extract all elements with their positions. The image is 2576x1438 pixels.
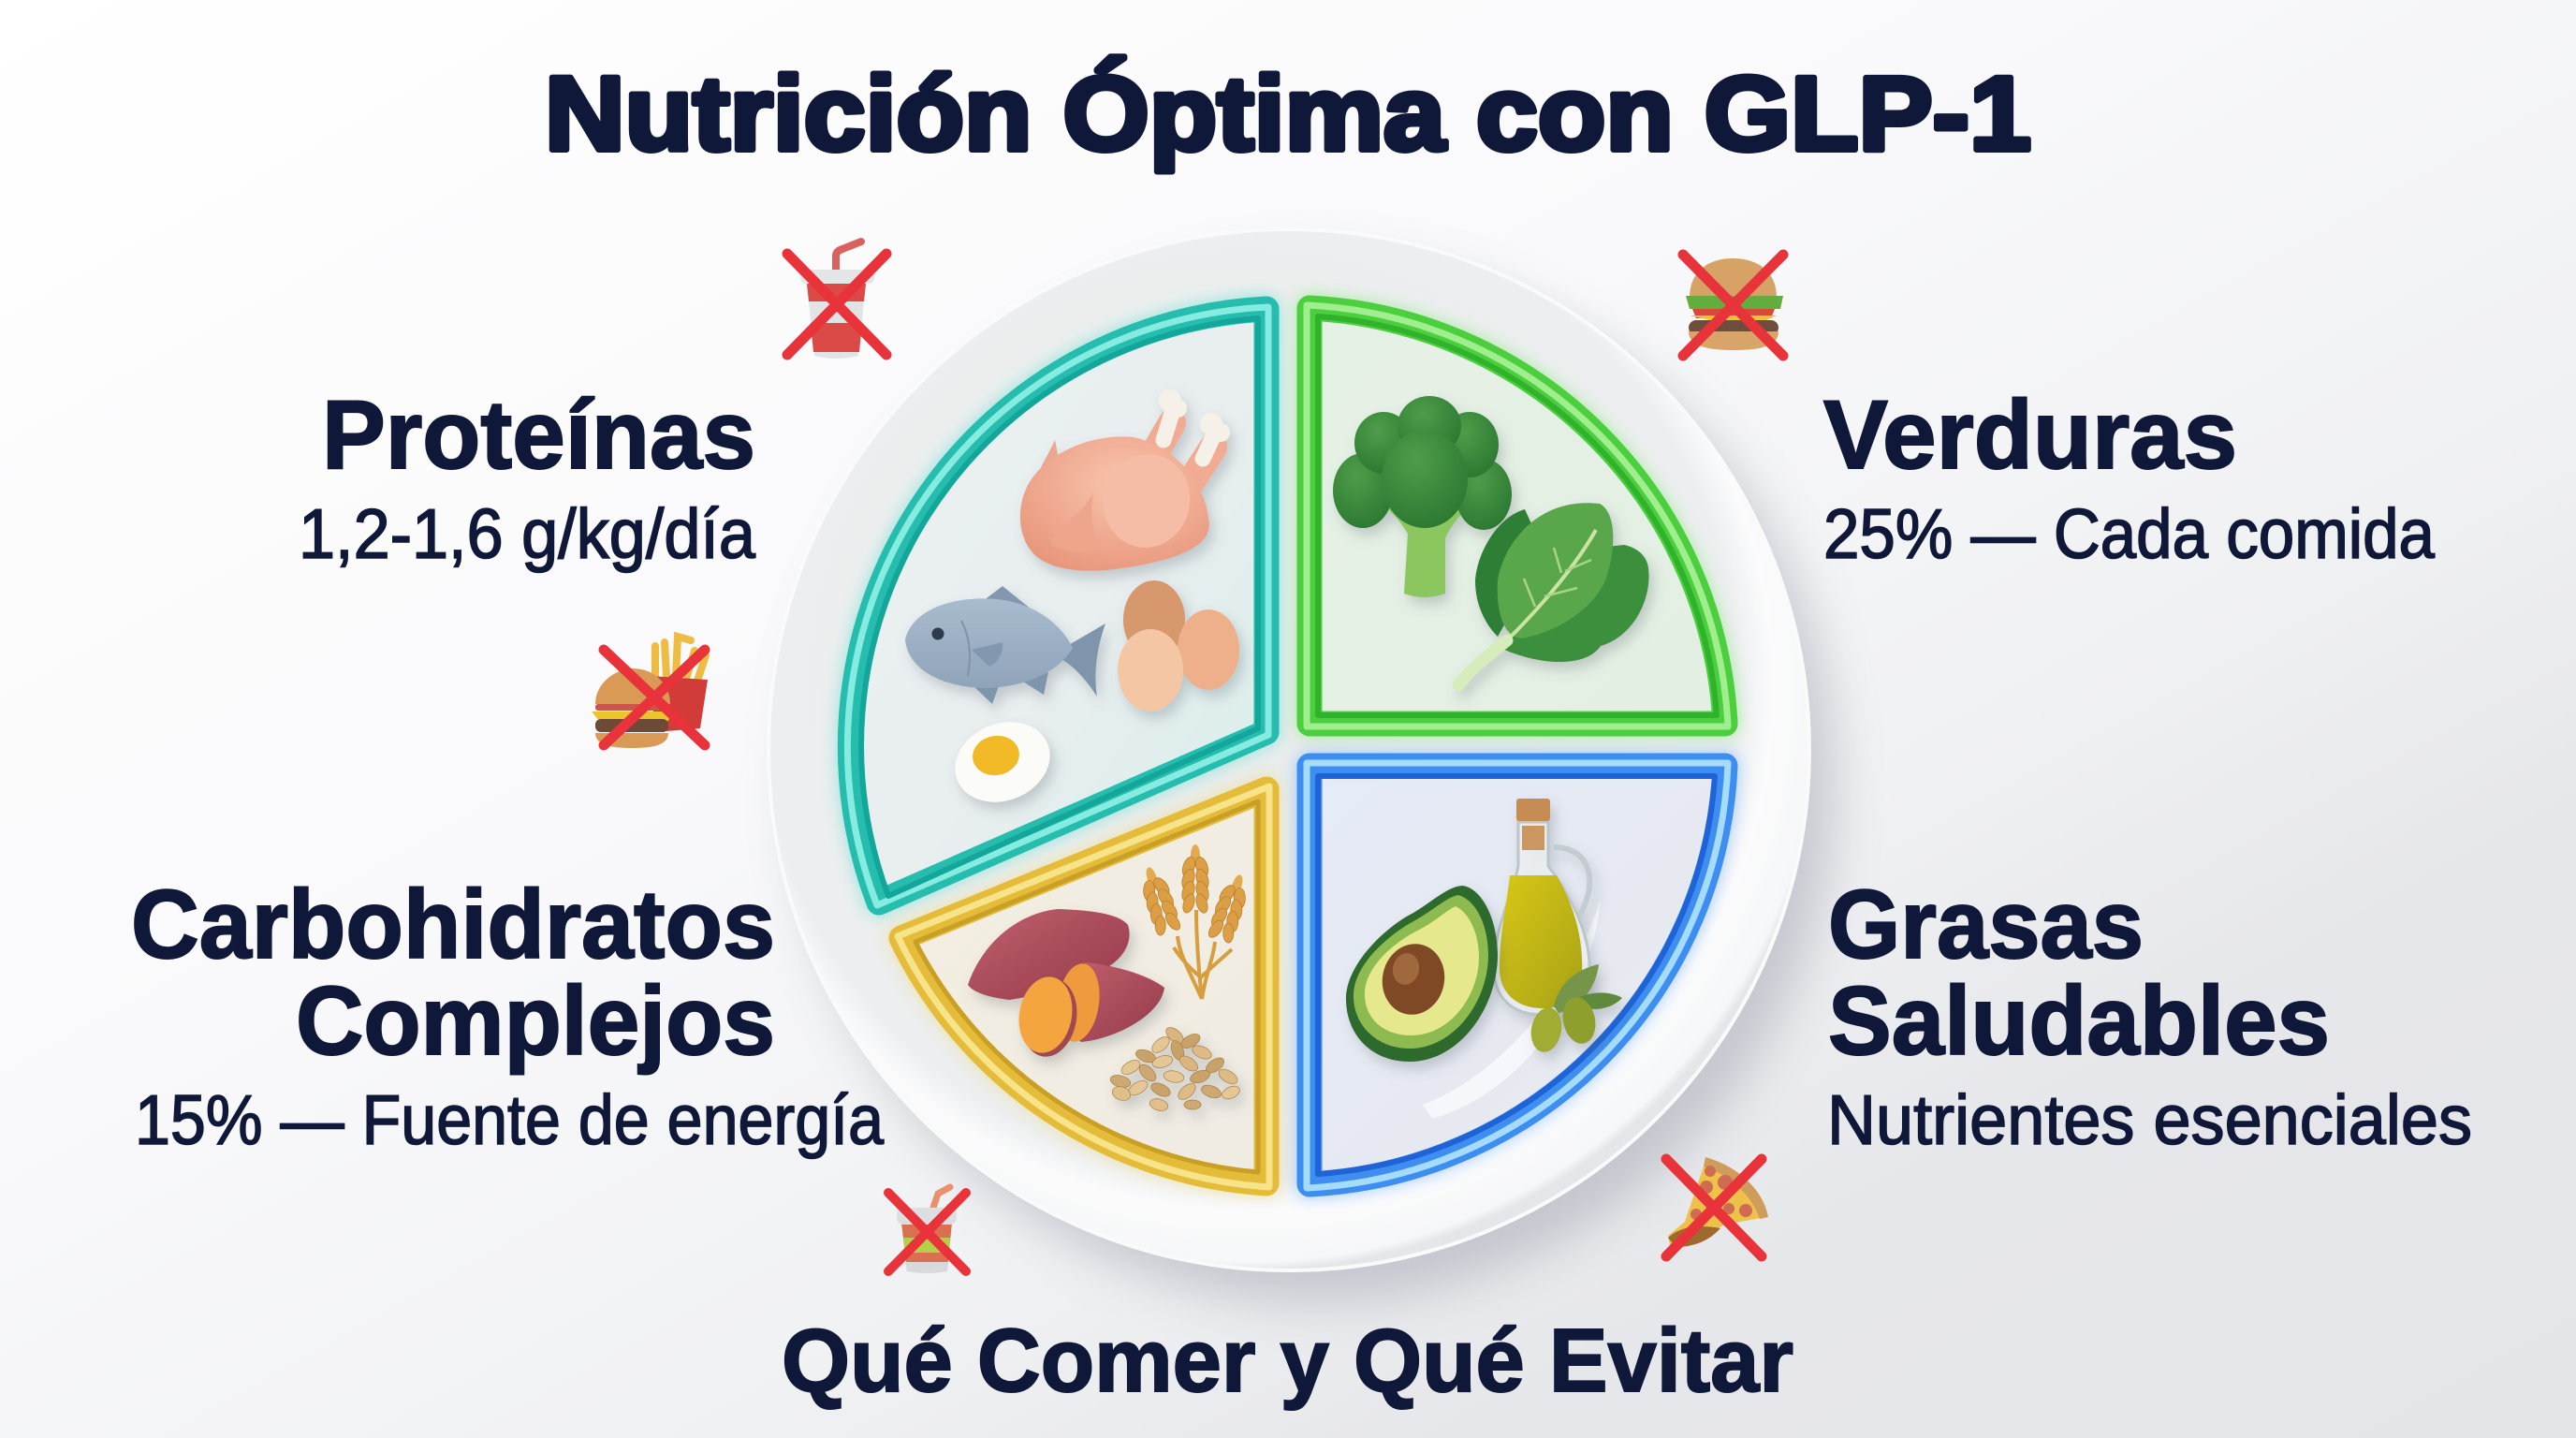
heading: Verduras [1823,381,2237,490]
green ring [1307,305,1728,726]
icon: crossed pizza [1666,1157,1768,1256]
icon: crossed soda cup [787,242,886,359]
label: carbohidratos complejos [131,871,884,1159]
label: grasas saludables [1827,871,2472,1159]
icon: eggs [1118,580,1239,712]
section: verduras [1307,305,1728,726]
label: verduras [1823,381,2435,573]
subtext: 15% — Fuente de energía [135,1080,884,1159]
heading: Proteínas [322,381,755,490]
icon: wheat [1134,844,1255,999]
icon: crossed drink [888,1187,966,1273]
icon: fried egg [943,709,1062,815]
heading line two: Complejos [296,967,775,1076]
icon: crossed burger [1683,255,1783,356]
icon: sweet potato [968,909,1164,1061]
subtext: 25% — Cada comida [1823,494,2435,573]
plate [768,229,1836,1302]
heading: Carbohidratos [131,871,775,979]
plate body [768,229,1809,1270]
heading: Grasas [1828,871,2144,979]
icon: spinach [1458,503,1649,685]
icon: olives [1528,964,1622,1054]
icon: broccoli [1333,396,1512,597]
section: carbohidratos [898,786,1269,1187]
icon: avocado [1346,886,1498,1062]
icon: crossed burger and fries [592,637,708,748]
footer heading: Qué Comer y Qué Evitar [782,1311,1793,1411]
label: proteínas [299,381,755,573]
section: grasas [1307,763,1728,1188]
icon: grains [1109,1024,1242,1112]
blue ring [1307,763,1728,1188]
title: Nutrición Óptima con GLP-1 [545,55,2031,172]
heading line two: Saludables [1828,967,2330,1076]
icon: chicken [1020,389,1230,571]
subtext: 1,2-1,6 g/kg/día [299,494,755,573]
yellow ring [898,786,1269,1187]
icon: oil bottle [1494,799,1589,1015]
teal ring [847,307,1268,905]
subtext: Nutrientes esenciales [1827,1080,2472,1159]
plate shadow [795,261,1836,1302]
plate reflection [1423,899,1601,1119]
section: proteínas [847,307,1268,905]
icon: fish [905,586,1105,704]
